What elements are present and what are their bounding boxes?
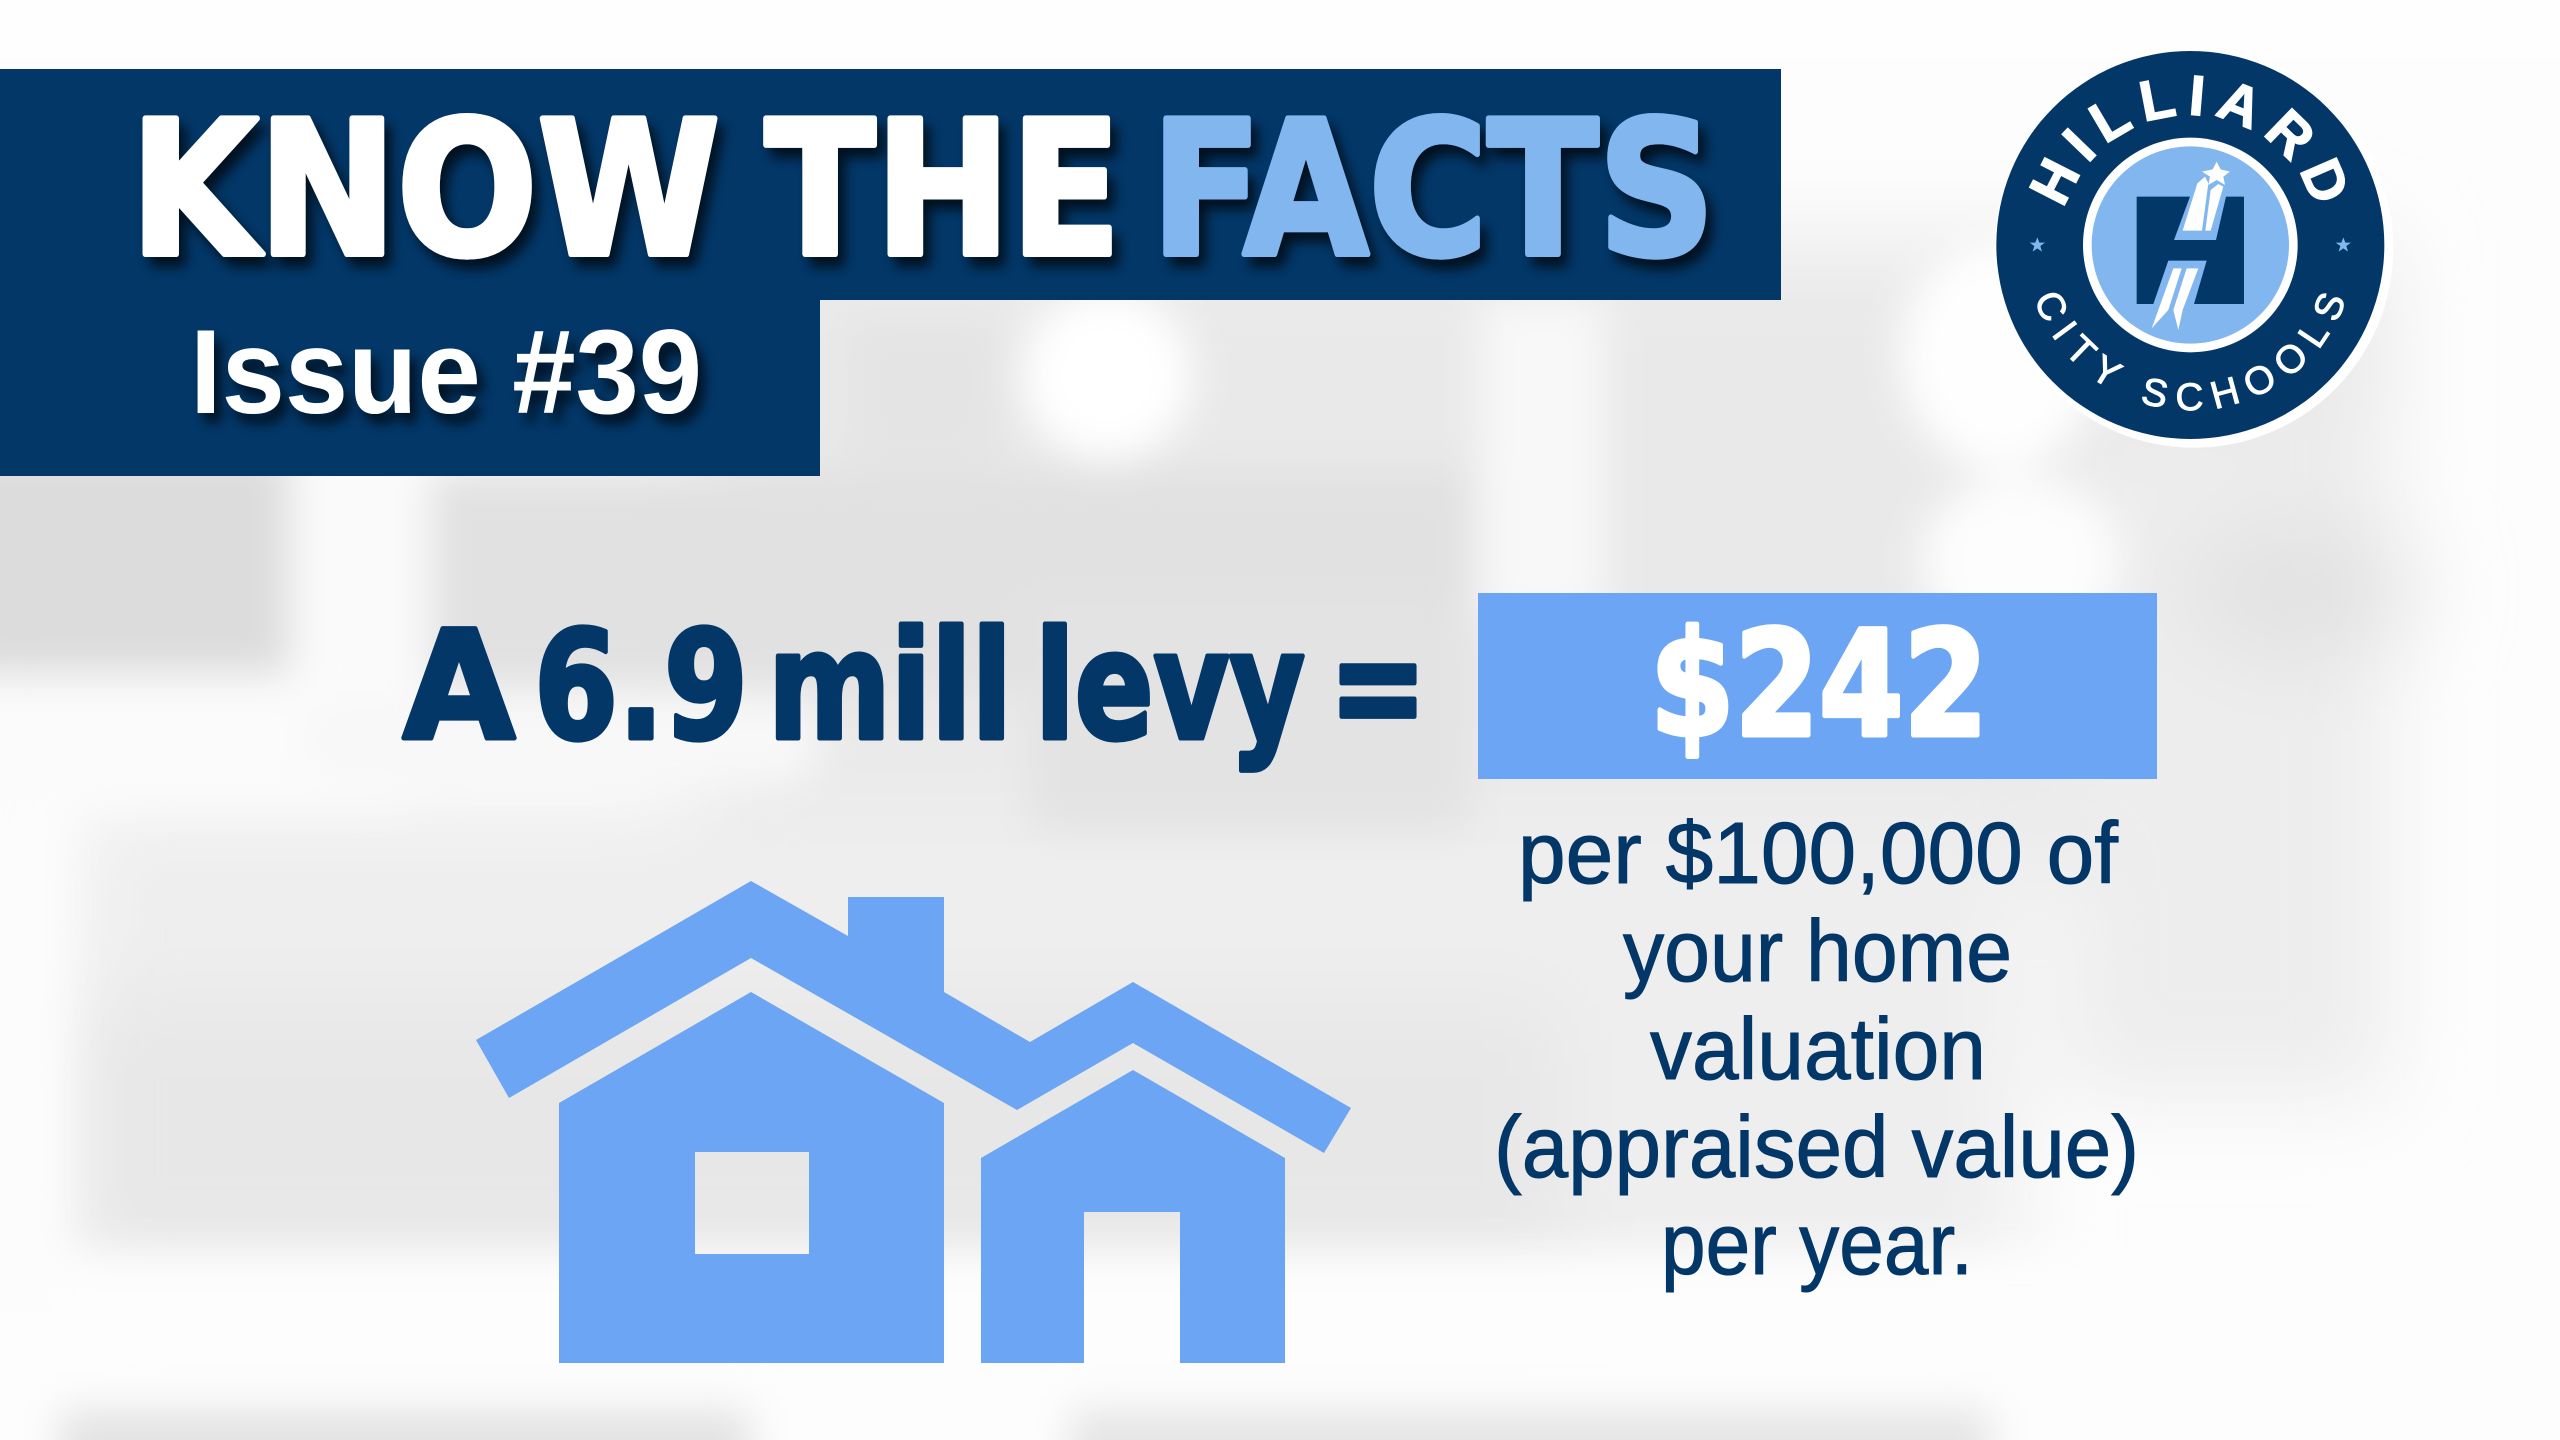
roof and chimney <box>476 881 1351 1153</box>
title: know the facts <box>130 81 1715 298</box>
description text: per year. <box>1661 1196 1973 1293</box>
description text: valuation <box>1650 1001 1986 1098</box>
description text <box>1494 805 2139 1293</box>
main house <box>559 992 944 1363</box>
logo text: CITY SCHOOLS: CITY SCHOOLS <box>2037 292 2344 411</box>
logo: Hilliard City Schools badge <box>1996 51 2392 448</box>
levy headline: = <box>1329 600 1427 774</box>
logo H mark <box>2137 162 2244 330</box>
levy headline <box>403 600 1427 774</box>
description text: per $100,000 of <box>1518 805 2119 902</box>
levy headline: 6.9 <box>534 600 748 774</box>
small house <box>981 1070 1285 1363</box>
issue number: Issue #39 <box>190 305 702 439</box>
amount: $242: $242 <box>1650 600 1988 770</box>
levy headline: levy <box>1035 600 1305 774</box>
header banner <box>0 69 1781 476</box>
logo text: HILLIARD: HILLIARD <box>2028 75 2345 206</box>
icon: two houses <box>476 881 1351 1363</box>
title: know the facts: FACTS <box>1151 81 1715 298</box>
logo stars <box>2030 237 2351 252</box>
title: know the facts: THE <box>765 81 1121 298</box>
title: know the facts: KNOW <box>130 81 720 298</box>
amount box <box>1478 593 2157 779</box>
levy headline: mill <box>768 600 1012 774</box>
description text: your home <box>1623 903 2012 1000</box>
description text: (appraised value) <box>1494 1099 2139 1196</box>
levy headline: A <box>403 600 515 774</box>
